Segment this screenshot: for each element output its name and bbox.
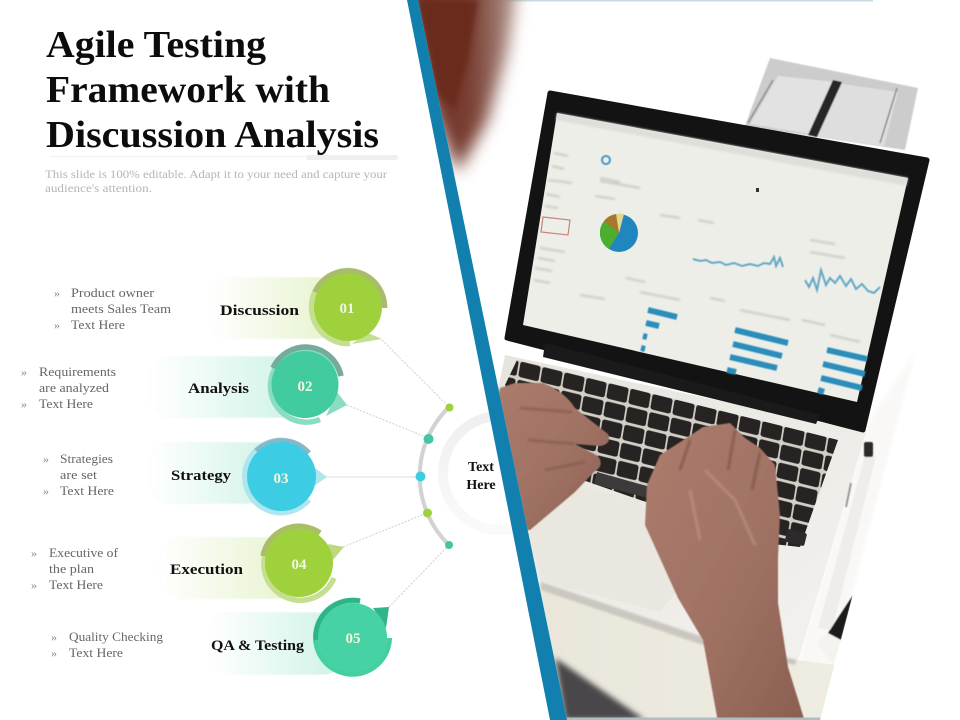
step 02 bullets: are analyzed xyxy=(39,381,110,395)
step 01: Discussion: 01 xyxy=(340,301,354,317)
step 03: Strategy: Strategy xyxy=(171,468,232,484)
step 02: Analysis: 02 xyxy=(298,379,312,395)
laptop deck xyxy=(490,355,866,664)
central circle: Text Here xyxy=(443,416,557,530)
connector lines xyxy=(326,340,449,607)
step 01 bullets: Product owner xyxy=(71,286,155,300)
step 02 bullets xyxy=(21,365,116,411)
step 04: Execution: 04 xyxy=(292,557,307,573)
step 04: Execution xyxy=(160,526,344,600)
subtitle text: audience's attention. xyxy=(45,181,152,195)
step 04 bullets: Text Here xyxy=(49,578,103,592)
title: Agile Testing xyxy=(46,24,266,66)
background stand xyxy=(745,58,918,150)
left hand xyxy=(490,383,609,530)
step 01 bullets: Text Here xyxy=(71,318,125,332)
title: Framework with xyxy=(46,69,330,111)
laptop lid and screen xyxy=(507,93,927,430)
step 01 bullets: meets Sales Team xyxy=(71,302,171,316)
screen bars xyxy=(641,310,867,392)
step 04 bullets: Executive of xyxy=(49,546,119,560)
keyboard xyxy=(505,360,838,547)
step 05 bullets: » xyxy=(51,630,57,644)
step 04: Execution: Execution xyxy=(170,562,244,578)
step 03: Strategy xyxy=(150,440,327,513)
arc with node dots xyxy=(416,404,454,549)
step 03 bullets: Strategies xyxy=(60,452,113,466)
pen and phone xyxy=(817,442,876,665)
step 05: QA and Testing: QA & Testing xyxy=(211,638,305,654)
step 05: QA and Testing xyxy=(210,600,390,675)
step 02 bullets: Text Here xyxy=(39,397,93,411)
right hand and arm xyxy=(645,423,805,720)
title: Discussion Analysis xyxy=(46,114,379,156)
step 02 bullets: Requirements xyxy=(39,365,116,379)
step 01 bullets xyxy=(54,286,171,332)
title xyxy=(46,24,379,156)
step 05 bullets xyxy=(51,630,164,660)
step 02 bullets: » xyxy=(21,397,27,411)
step 02: Analysis: Analysis xyxy=(188,381,249,397)
right side soft surface xyxy=(802,376,906,664)
screen sidebar and blurred labels xyxy=(534,153,860,342)
diagonal blue band xyxy=(407,0,567,720)
step 04 bullets: » xyxy=(31,578,37,592)
step 03: Strategy: 03 xyxy=(274,471,288,487)
step 04 bullets xyxy=(31,546,119,592)
step 05 bullets: Text Here xyxy=(69,646,123,660)
screen pie chart xyxy=(600,214,638,252)
step 03 bullets: » xyxy=(43,452,49,466)
step 03 bullets xyxy=(43,452,114,498)
step 04 bullets: the plan xyxy=(49,562,95,576)
subtitle text xyxy=(45,167,387,195)
step 01: Discussion xyxy=(210,271,385,344)
step 03 bullets: Text Here xyxy=(60,484,114,498)
step 04 bullets: » xyxy=(31,546,37,560)
step 05: QA and Testing: 05 xyxy=(346,631,360,647)
central circle: Text Here: Text xyxy=(468,460,494,475)
step 05 bullets: » xyxy=(51,646,57,660)
step 02 bullets: » xyxy=(21,365,27,379)
step 05 bullets: Quality Checking xyxy=(69,630,164,644)
photo: hands typing on laptop xyxy=(405,0,960,720)
step 01 bullets: » xyxy=(54,286,60,300)
step 01: Discussion: Discussion xyxy=(220,303,300,319)
desk xyxy=(530,580,835,720)
step 03 bullets: are set xyxy=(60,468,98,482)
step 01 bullets: » xyxy=(54,318,60,332)
central circle: Text Here: Here xyxy=(466,478,496,493)
screen line charts xyxy=(693,257,880,293)
step 02: Analysis xyxy=(150,347,347,422)
subtitle text: This slide is 100% editable. Adapt it to your need and capture your xyxy=(45,167,387,181)
step 03 bullets: » xyxy=(43,484,49,498)
